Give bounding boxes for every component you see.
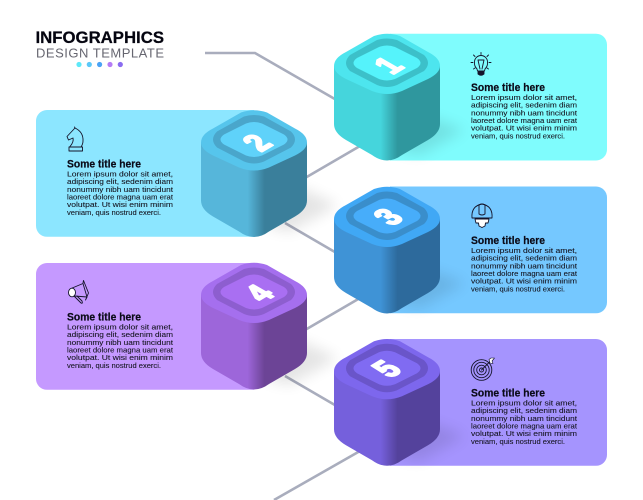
text: panel 1 — [471, 82, 577, 140]
cube shadows — [265, 115, 465, 461]
number 3: 3 — [365, 203, 412, 230]
text: panel 4: adipiscing elit, sedenim diam — [67, 330, 173, 339]
text: panel 2: nonummy nibh uam tincidunt — [67, 185, 173, 194]
icon: megaphone — [68, 280, 88, 303]
text: panel 3: veniam, quis nostrud exerci. — [471, 284, 565, 294]
text: panel 1: veniam, quis nostrud exerci. — [471, 132, 565, 140]
text: panel 1: Some title here — [471, 82, 545, 94]
text: panel 3: nonummy nibh uam tincidunt — [471, 261, 577, 270]
panel 2 background — [36, 110, 254, 237]
text: panel 3: laoreet dolore magna uam erat — [471, 269, 577, 278]
text: panel 2: volutpat. Ut wisi enim minim — [67, 200, 173, 209]
text: panel 1: Lorem ipsum dolor sit amet, — [471, 93, 577, 102]
text: panel 2 — [67, 158, 173, 217]
text: panel 3 — [471, 235, 577, 294]
text: panel 4: Some title here — [67, 312, 141, 324]
text: panel 2: laoreet dolore magna uam erat — [67, 192, 173, 202]
text: panel 3: adipiscing elit, sedenim diam — [471, 254, 577, 262]
text: panel 3: volutpat. Ut wisi enim minim — [471, 277, 577, 286]
text: panel 4 — [67, 312, 173, 370]
text: panel 5: laoreet dolore magna uam erat — [471, 422, 577, 430]
text: panel 5: volutpat. Ut wisi enim minim — [471, 429, 577, 438]
icon: light bulb — [471, 52, 491, 75]
subtitle: design template: DESIGN TEMPLATE — [36, 46, 164, 60]
number 5: 5 — [363, 355, 410, 382]
text: panel 5: nonummy nibh uam tincidunt — [471, 414, 577, 423]
text: panel 4: veniam, quis nostrud exerci. — [67, 361, 161, 370]
icon: target with dart — [471, 358, 494, 380]
text: panel 5 — [471, 388, 577, 446]
number 2: 2 — [234, 129, 281, 156]
panel 3 background — [390, 186, 607, 313]
cube 5 — [334, 339, 440, 466]
text: panel 4: Lorem ipsum dolor sit amet, — [67, 322, 173, 331]
text: panel 3: Lorem ipsum dolor sit amet, — [471, 246, 577, 255]
panel 5 background — [390, 339, 607, 466]
cube 3 — [334, 187, 440, 314]
icon: helmet with gear — [472, 204, 492, 228]
text: panel 1: laoreet dolore magna uam erat — [471, 116, 577, 125]
panel 4 background — [36, 263, 254, 390]
cube 2 — [201, 110, 307, 237]
text: panel 4: volutpat. Ut wisi enim minim — [67, 353, 173, 362]
number 1: 1 — [365, 52, 412, 79]
title: infographics: INFOGRAPHICS — [36, 28, 164, 47]
text: panel 1: volutpat. Ut wisi enim minim — [471, 124, 577, 133]
text: panel 4: nonummy nibh uam tincidunt — [67, 338, 173, 347]
text: panel 5: Some title here — [471, 388, 545, 400]
number 4: 4 — [236, 280, 283, 307]
title block — [36, 28, 164, 67]
text: panel 5: veniam, quis nostrud exerci. — [471, 437, 565, 446]
text: panel 3: Some title here — [471, 235, 545, 247]
text: panel 2: adipiscing elit, sedenim diam — [67, 177, 173, 186]
cube 4 — [201, 263, 307, 390]
text: panel 4: laoreet dolore magna uam erat — [67, 346, 173, 354]
text: panel 1: nonummy nibh uam tincidunt — [471, 108, 577, 117]
text: panel 5: Lorem ipsum dolor sit amet, — [471, 398, 577, 407]
text: panel 2: veniam, quis nostrud exerci. — [67, 208, 161, 217]
icon: chess knight — [67, 127, 83, 151]
text: panel 2: Some title here — [67, 158, 141, 170]
panel 1 background — [390, 34, 607, 161]
text: panel 5: adipiscing elit, sedenim diam — [471, 406, 577, 415]
five colour dots — [76, 62, 123, 67]
cube 1 — [334, 34, 440, 160]
text: panel 1: adipiscing elit, sedenim diam — [471, 100, 577, 110]
text: panel 2: Lorem ipsum dolor sit amet, — [67, 169, 173, 178]
connector segments — [205, 53, 360, 500]
